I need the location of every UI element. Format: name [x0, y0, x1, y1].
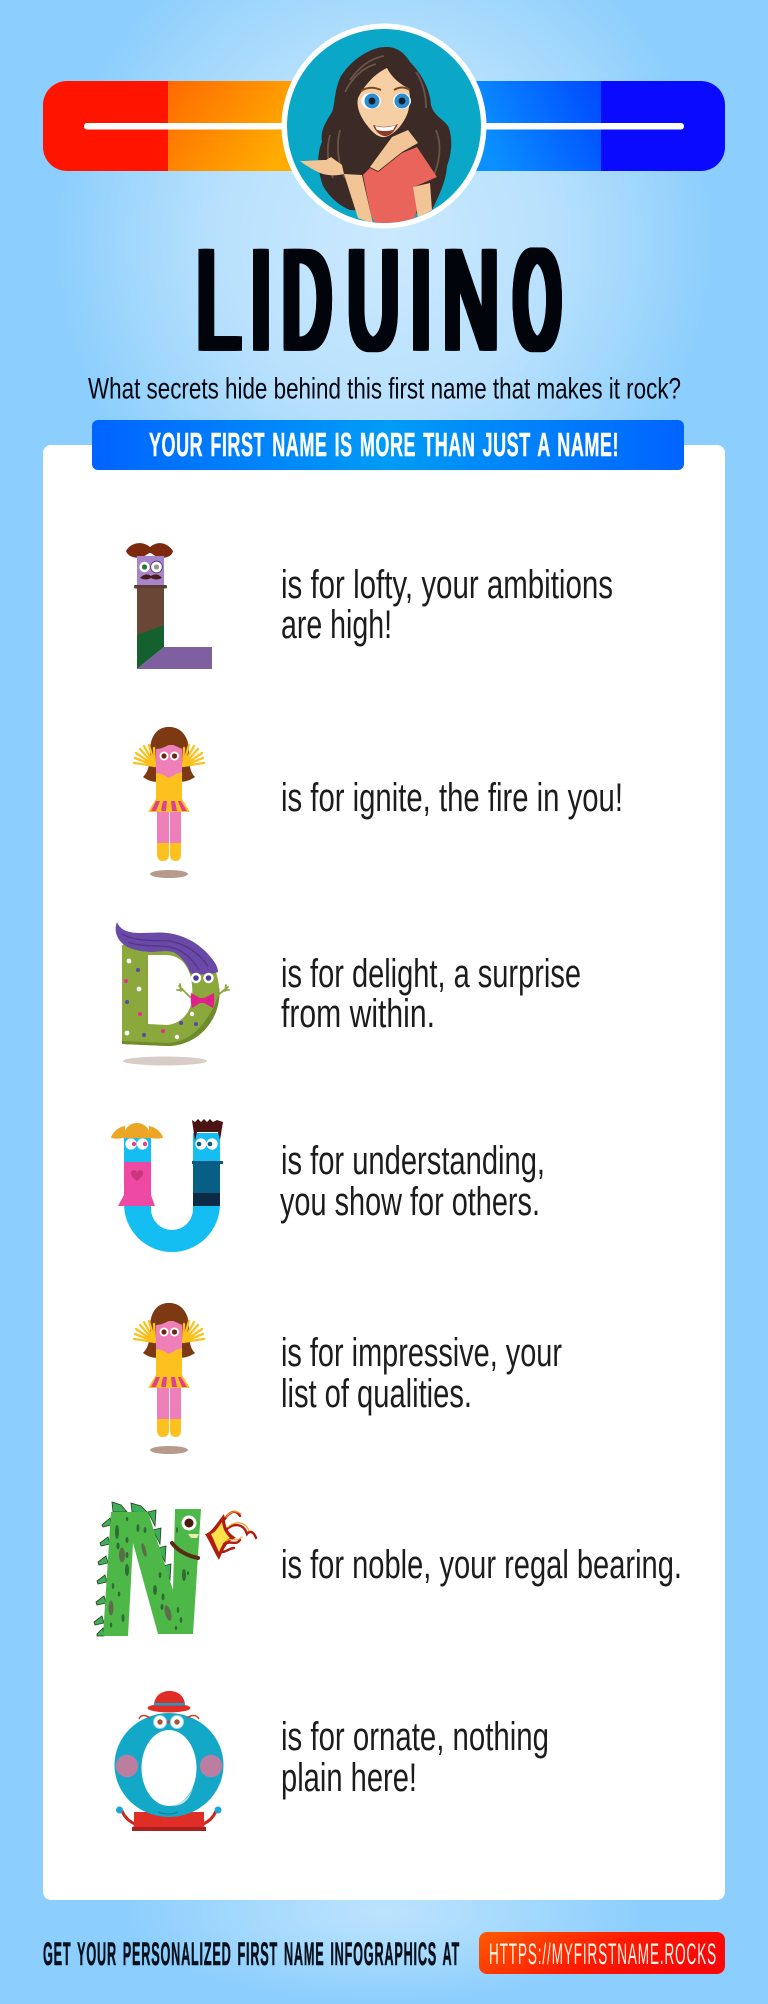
title: name: U — [348, 221, 398, 380]
letter U character pair — [111, 1119, 223, 1252]
banner — [92, 420, 684, 470]
line: O: is for ornate, nothing — [281, 1715, 549, 1759]
letter O character — [114, 1691, 224, 1831]
line: L: are high! — [281, 603, 392, 647]
line: O — [281, 1715, 549, 1800]
line: U: you show for others. — [280, 1180, 540, 1224]
title: name: I — [411, 221, 431, 380]
avatar: woman in circle — [282, 24, 486, 228]
line: I second: list of qualities. — [281, 1372, 472, 1416]
title: name: I — [251, 221, 271, 380]
line: I second — [281, 1331, 562, 1416]
icon: dragon flame — [205, 1512, 256, 1560]
line: U: is for understanding, — [281, 1139, 545, 1183]
line: L — [281, 563, 613, 647]
letter D character — [116, 922, 229, 1066]
white content panel — [43, 445, 725, 1900]
footer url button — [479, 1932, 725, 1974]
title: name — [196, 221, 562, 380]
title: name: L — [196, 221, 240, 380]
letter L character — [126, 543, 212, 669]
line: U — [280, 1139, 545, 1224]
top gradient bar — [43, 81, 725, 171]
line: O: plain here! — [281, 1756, 417, 1800]
letter I cheerleader character (second) — [134, 1303, 204, 1454]
line: L: is for lofty, your ambitions — [281, 563, 613, 607]
letter N dragon character — [94, 1502, 256, 1636]
title: name: O — [515, 221, 560, 380]
letter I cheerleader character — [134, 727, 204, 878]
line: I second: is for impressive, your — [281, 1331, 562, 1375]
title: name: D — [283, 221, 331, 380]
line: D: is for delight, a surprise — [281, 952, 581, 996]
line: I: is for ignite, the fire in you! — [281, 776, 623, 820]
line: D: from within. — [281, 992, 435, 1036]
title: name: N — [443, 221, 499, 380]
line: D — [281, 952, 581, 1036]
